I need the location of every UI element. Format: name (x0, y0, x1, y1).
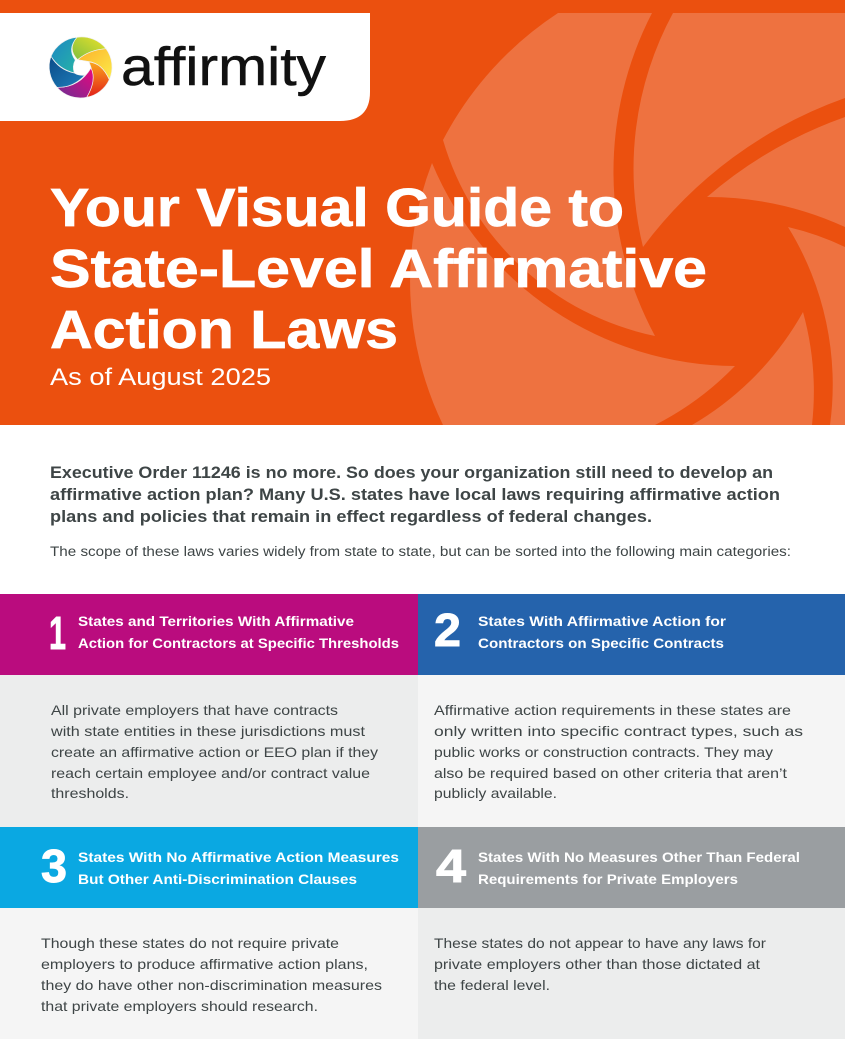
panel: category 2: Affirmative action requirements in these states are (434, 702, 791, 718)
intro text: The scope of these laws varies widely from state to state, but can be sorted into the following main categories: (50, 544, 791, 559)
panel: category 2: States With Affirmative Action for (478, 614, 727, 629)
intro text: affirmative action plan? Many U.S. states have local laws requiring affirmative action (50, 485, 780, 504)
panel: category 3: they do have other non-discrimination measures (41, 977, 382, 993)
panel: category 3: States With No Affirmative Action Measures (78, 850, 399, 865)
panel: category 3: 3 (41, 840, 67, 892)
panel: category 4: the federal level. (434, 977, 550, 993)
panel: category 2: publicly available. (434, 785, 557, 801)
subtitle: As of August 2025 (50, 364, 271, 391)
logo panel (0, 13, 370, 121)
panel: category 3: Though these states do not require private (41, 935, 339, 951)
intro text: Executive Order 11246 is no more. So does your organization still need to develop an (50, 463, 773, 482)
panel: category 3: that private employers should research. (41, 998, 318, 1014)
title: Your Visual Guide to (50, 178, 624, 238)
hero banner (0, 0, 845, 425)
panel: category 4 (418, 827, 845, 1039)
panel: category 1: thresholds. (51, 785, 129, 801)
panel: category 1: All private employers that have contracts (51, 702, 338, 718)
panel: category 1: with state entities in these jurisdictions must (50, 723, 365, 739)
panel: category 3: But Other Anti-Discrimination Clauses (78, 872, 357, 887)
title: Action Laws (50, 300, 398, 360)
panel: category 2 (418, 594, 845, 827)
intro text (50, 463, 791, 559)
panel: category 4: private employers other than those dictated at (434, 956, 760, 972)
intro text: plans and policies that remain in effect regardless of federal changes. (50, 507, 652, 526)
panel: category 1 (0, 594, 418, 827)
panel: category 1: States and Territories With Affirmative (78, 614, 355, 629)
panel: category 1: create an affirmative action or EEO plan if they (51, 744, 378, 760)
aperture graphic (410, 13, 845, 425)
panel: category 2: public works or construction contracts. They may (434, 744, 773, 760)
panel: category 2: only written into specific contract types, such as (434, 723, 803, 739)
wordmark: affirmity (121, 37, 326, 97)
panel: category 4: Requirements for Private Employers (478, 872, 738, 887)
panel: category 3 (0, 827, 418, 1039)
panel: category 3: employers to produce affirmative action plans, (41, 956, 368, 972)
panel: category 1: reach certain employee and/or contract value (51, 765, 370, 781)
icon: affirmity aperture (49, 37, 112, 98)
title: State-Level Affirmative (50, 239, 707, 299)
panel: category 1: Action for Contractors at Specific Thresholds (78, 636, 399, 651)
panel: category 4: 4 (436, 840, 466, 892)
panel: category 1: 1 (49, 607, 66, 659)
panel: category 4: States With No Measures Other Than Federal (478, 850, 800, 865)
title (50, 178, 707, 360)
panel: category 4: These states do not appear to have any laws for (434, 935, 766, 951)
panel: category 2: 2 (434, 604, 461, 656)
panel: category 2: Contractors on Specific Contracts (478, 636, 724, 651)
panel: category 2: also be required based on other criteria that aren’t (434, 765, 787, 781)
